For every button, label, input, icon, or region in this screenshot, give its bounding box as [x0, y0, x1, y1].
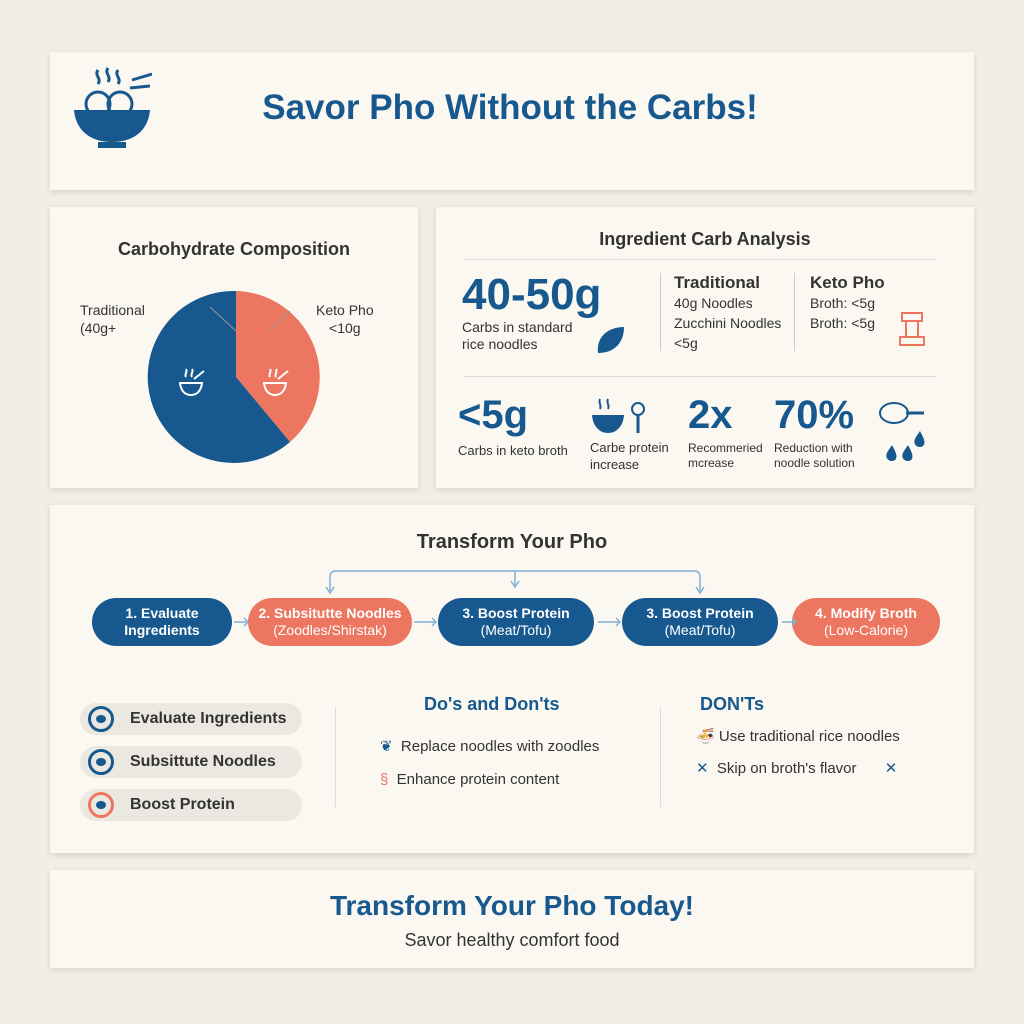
- stat: 40-50g: 40-50g: [462, 270, 601, 319]
- column: keto pho: [810, 273, 885, 331]
- flow step 4: (Meat/Tofu): [665, 622, 735, 638]
- stat: 70%: Reduction with: [774, 441, 853, 455]
- panel: ingredient carb analysis: increase: [590, 457, 639, 472]
- stat: 2x: [688, 393, 763, 470]
- stat: 70%: noodle solution: [774, 456, 855, 470]
- stat: 40-50g: Carbs in standard: [462, 319, 573, 335]
- stat: 2x: mcrease: [688, 456, 734, 470]
- stat: <5g: [458, 393, 568, 458]
- icon: spool: [899, 312, 925, 346]
- stat: 2x: 2x: [688, 393, 732, 437]
- stat: 40-50g: [462, 270, 624, 353]
- pie chart: [148, 291, 320, 463]
- don'ts list: ✕ Skip on broth's flavor ✕: [696, 760, 897, 777]
- column: traditional: Zucchini Noodles: [674, 315, 781, 331]
- don'ts list: 🍜 Use traditional rice noodles: [696, 728, 900, 745]
- column: keto pho: Keto Pho: [810, 273, 885, 292]
- panel: carbohydrate composition: [50, 207, 418, 488]
- flow arrows: [234, 618, 797, 626]
- flow step 2: [248, 598, 412, 646]
- chip: evaluate: Evaluate Ingredients: [130, 710, 286, 727]
- icon: bowl and drumstick: [592, 398, 645, 433]
- column: traditional: 40g Noodles: [674, 295, 753, 311]
- flow step 3: (Meat/Tofu): [481, 622, 551, 638]
- bracket arrows: [326, 570, 704, 594]
- column: keto pho: Broth: <5g: [810, 295, 875, 311]
- flow step 2: (Zoodles/Shirstak): [273, 622, 387, 638]
- heading: Transform Your Pho: [417, 531, 607, 553]
- flow step 1: 1. Evaluate: [125, 605, 199, 621]
- flow step 4: [622, 598, 778, 646]
- icon: pho bowl: [74, 67, 152, 148]
- panel: ingredient carb analysis: Carbe protein: [590, 440, 669, 455]
- footer panel: [50, 870, 974, 968]
- label: traditional: [80, 302, 145, 336]
- flow step 5: (Low-Calorie): [824, 622, 908, 638]
- chip: evaluate: [80, 703, 302, 735]
- stat: <5g: Carbs in keto broth: [458, 443, 568, 458]
- column: keto pho: Broth: <5g: [810, 315, 875, 331]
- footer subtext: Savor healthy comfort food: [404, 930, 620, 950]
- flow step 5: [792, 598, 940, 646]
- footer heading: Transform Your Pho Today!: [330, 890, 694, 921]
- flow step 1: [92, 598, 232, 646]
- flow step 3: 3. Boost Protein: [462, 605, 570, 621]
- panel: ingredient carb analysis: [436, 207, 974, 488]
- do's list: ❦ Replace noodles with zoodles: [380, 738, 599, 755]
- stat: 70%: [774, 393, 855, 470]
- flow step 4: 3. Boost Protein: [646, 605, 754, 621]
- chip: boost: [80, 789, 302, 821]
- stat: 70%: 70%: [774, 393, 854, 437]
- label: keto: Keto Pho: [316, 302, 374, 318]
- do's list: [380, 694, 599, 788]
- do's list: § Enhance protein content: [380, 771, 559, 788]
- header panel: [50, 52, 974, 190]
- chip: substitute: [80, 746, 302, 778]
- stat: 40-50g: rice noodles: [462, 336, 538, 352]
- flow step 1: Ingredients: [124, 622, 200, 638]
- title: Savor Pho Without the Carbs!: [262, 88, 758, 127]
- don'ts list: [696, 694, 900, 777]
- don'ts list: DON'Ts: [700, 694, 764, 714]
- flow step 2: 2. Subsitutte Noodles: [258, 605, 402, 621]
- stat: <5g: <5g: [458, 393, 528, 437]
- column: traditional: <5g: [674, 335, 698, 351]
- label: traditional: (40g+: [80, 320, 116, 336]
- label: keto: <10g: [329, 320, 361, 336]
- label: traditional: Traditional: [80, 302, 145, 318]
- do's list: Do's and Don'ts: [424, 694, 560, 714]
- heading: Carbohydrate Composition: [118, 239, 350, 259]
- icon: drumstick and drops: [879, 402, 924, 461]
- chip: boost: Boost Protein: [130, 796, 235, 813]
- heading: Ingredient Carb Analysis: [599, 229, 811, 249]
- stat: 2x: Recommeried: [688, 441, 763, 455]
- chip: substitute: Subsittute Noodles: [130, 753, 276, 770]
- column: traditional: [674, 273, 781, 351]
- flow step 3: [438, 598, 594, 646]
- flow step 5: 4. Modify Broth: [815, 605, 917, 621]
- panel: transform your pho: [50, 505, 974, 853]
- column: traditional: Traditional: [674, 273, 760, 292]
- label: keto: [316, 302, 374, 336]
